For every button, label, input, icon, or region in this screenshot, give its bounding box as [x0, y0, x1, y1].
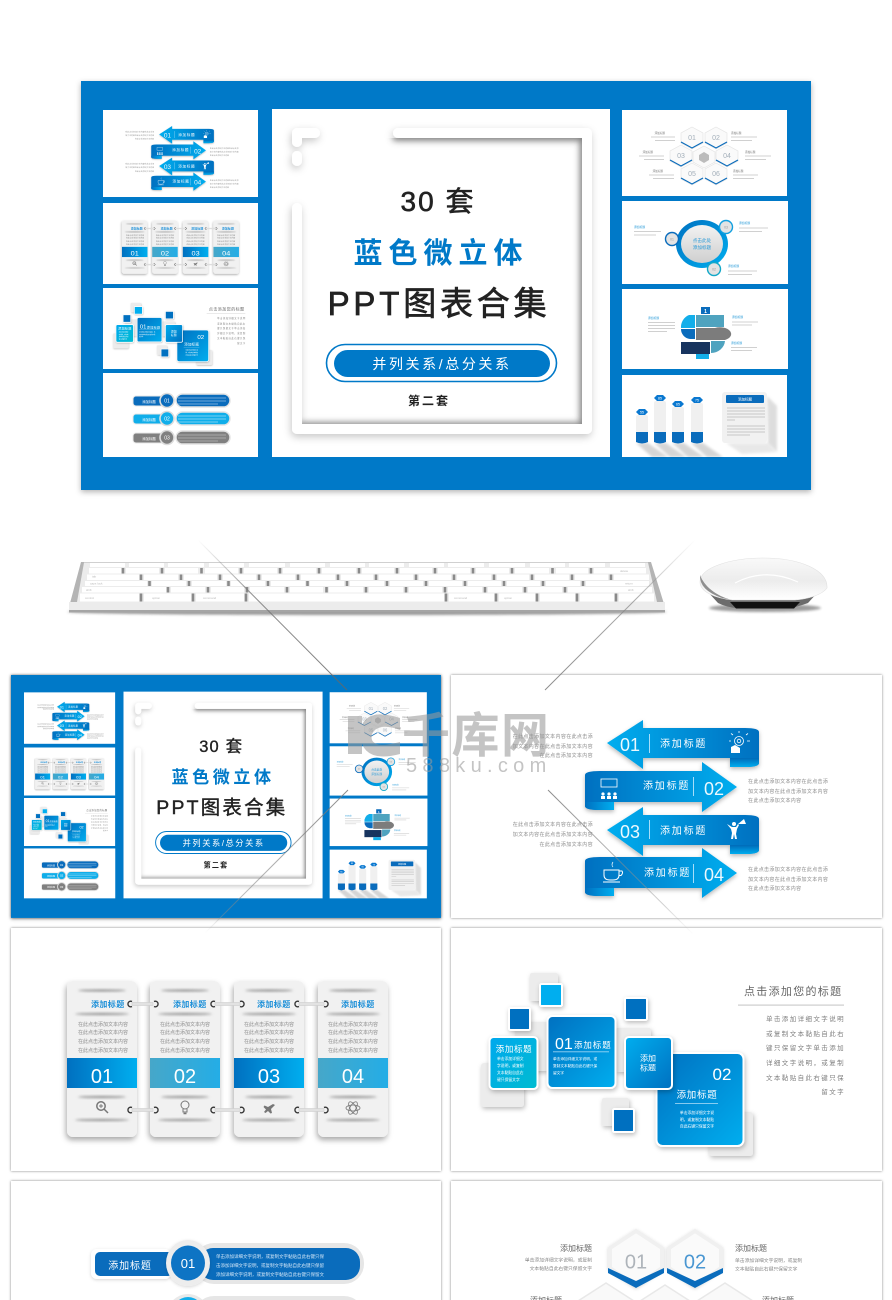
icon: light bulb — [181, 1101, 189, 1114]
thumbnail: cards slide — [103, 203, 258, 284]
note card: 添加标题 — [738, 396, 752, 402]
key labels: control — [85, 596, 94, 600]
box: 01: 复制文本黏贴自此右键只保 — [553, 1063, 598, 1068]
thumbnail: hexagon slide: 05 — [688, 171, 696, 178]
card 01: 01 — [91, 1066, 113, 1088]
paragraph: 留文字 — [821, 1087, 845, 1096]
small blue squares — [509, 984, 647, 1132]
key labels: shift — [86, 588, 92, 592]
note card — [722, 392, 777, 454]
thumbnail: pill rows slide: 添加标题 — [142, 436, 156, 441]
card 04: 在此点击添加文本内容 — [328, 1047, 378, 1054]
key labels: shift — [628, 588, 634, 592]
thumbnail: pill rows slide: 添加标题 — [142, 417, 156, 422]
label upper right: 单击添加详细文字说明，或复制 — [735, 1257, 802, 1264]
column 4: 75 — [695, 398, 699, 402]
paragraph: 键只保留文字单击添加 — [766, 1043, 845, 1052]
text block upper right: 在此点击添加文本内容在此点击添 — [748, 778, 828, 785]
thumbnail: circle slide: 01 — [670, 238, 674, 242]
pill row 01 — [91, 1240, 364, 1286]
thumbnail: circle slide: 添加标题 — [739, 221, 750, 225]
thumbnail: hexagon slide: 添加标题 — [745, 150, 756, 154]
box: side title blue — [625, 1037, 672, 1089]
text block lower left: 加文本内容在此点击添加文本内容 — [513, 831, 593, 838]
hexagon 02: 02 — [684, 1252, 706, 1274]
card 01 — [67, 981, 137, 1137]
key labels: caps lock — [90, 582, 103, 586]
column 1: 55 — [640, 410, 644, 414]
box: side title blue: 添加 — [640, 1053, 656, 1063]
card 02: 在此点击添加文本内容 — [160, 1021, 210, 1028]
arrow 03 — [607, 807, 759, 856]
box: 02: 单击添加详细文字说 — [680, 1110, 714, 1115]
paragraph: 单击添加详细文字说明 — [766, 1014, 845, 1023]
arrow 03: 添加标题 — [660, 824, 707, 837]
thumbnail: hexagon slide: 添加标题 — [643, 150, 653, 154]
key labels: command — [203, 596, 217, 600]
card 02: 在此点击添加文本内容 — [160, 1038, 210, 1045]
card 03: 在此点击添加文本内容 — [244, 1029, 294, 1036]
icon: magnifier — [97, 1102, 108, 1113]
slide: four arrows — [451, 675, 882, 918]
thumbnail: hexagon slide: 03 — [677, 153, 685, 160]
column 3: 65 — [676, 402, 680, 406]
box: side title blue: 标题 — [640, 1062, 656, 1072]
column 4 — [691, 397, 703, 444]
box: 01 — [548, 1016, 616, 1088]
thumbnail: hexagon slide: 添加标题 — [655, 131, 665, 135]
hexagon 02 — [667, 1231, 723, 1288]
arrow 02: 添加标题 — [643, 779, 690, 792]
card 01: 在此点击添加文本内容 — [78, 1047, 128, 1054]
text block lower left — [513, 821, 593, 848]
thumbnail: pill rows slide: 03 — [164, 436, 170, 442]
icon: coffee cup — [603, 862, 623, 882]
thumbnail: hexagon slide: 添加标题 — [733, 169, 744, 173]
pill row 01: 击添加详细文字说明，或复制文字黏贴自此右键只保留 — [216, 1262, 324, 1269]
slide: layered squares — [451, 928, 882, 1171]
grey backing squares — [481, 973, 753, 1156]
thumbnail: S-shape puzzle slide: 添加标题 — [731, 341, 742, 345]
thumbnail: circle slide: 点击此处 — [693, 237, 712, 244]
card 04: 在此点击添加文本内容 — [328, 1029, 378, 1036]
label upper left: 文本黏贴自此右键只保留文字 — [530, 1265, 592, 1272]
thumbnail: S-shape puzzle slide — [622, 289, 788, 369]
cover slide: large blue poster — [81, 81, 811, 490]
text block upper right — [748, 778, 828, 804]
column 3 — [672, 401, 684, 444]
thumbnail: pill rows slide: 02 — [164, 416, 170, 422]
hexagon 01 — [608, 1231, 664, 1288]
box: 02: 明，或复制文本黏贴 — [680, 1117, 714, 1122]
label upper right: 文本黏贴自此右键只保留文字 — [735, 1266, 798, 1272]
text block lower left: 在此点击添加文本内容在此点击添 — [513, 821, 593, 828]
computer mouse — [700, 558, 827, 612]
text block upper right: 加文本内容在此点击添加文本内容 — [748, 788, 828, 795]
label upper right: 添加标题 — [735, 1243, 767, 1253]
text block lower left: 在此点击添加文本内容 — [539, 841, 593, 848]
white frame — [297, 133, 587, 429]
slide: pill rows, cropped — [11, 1181, 441, 1300]
card 01: 在此点击添加文本内容 — [78, 1038, 128, 1045]
subtitle pill — [326, 344, 556, 382]
arrow 04 — [585, 848, 737, 898]
key labels: tab — [92, 574, 97, 578]
card 03 — [234, 981, 304, 1137]
icon: atom — [346, 1100, 360, 1116]
thumbnail: hexagon slide: 添加标题 — [653, 169, 663, 173]
arrow 04: 添加标题 — [644, 866, 691, 879]
box: side title cyan: 字说明，或复制 — [497, 1063, 524, 1068]
pill row 01: 添加标题 — [108, 1259, 152, 1272]
key labels: option — [504, 596, 513, 600]
box: side title cyan: 单击添加详细文 — [497, 1056, 524, 1061]
slide: cover thumbnail copy — [11, 675, 441, 918]
hexagon 01: 01 — [625, 1252, 647, 1274]
thumbnail: hexagon slide: 02 — [712, 135, 720, 142]
icon: airplane — [264, 1104, 275, 1114]
text block lower right: 在此点击添加文本内容 — [748, 885, 802, 892]
ring connectors — [128, 1001, 328, 1113]
subtitle pill: 并列关系/总分关系 — [372, 356, 512, 372]
set number: 第二套 — [408, 393, 450, 408]
key stems — [123, 568, 616, 602]
thumbnail: hexagon slide: 01 — [688, 135, 696, 142]
card 03: 在此点击添加文本内容 — [244, 1021, 294, 1028]
thumbnail: squares slide — [103, 288, 258, 369]
arrow 04: 04 — [704, 865, 724, 885]
card 02: 02 — [174, 1066, 196, 1088]
box: 01: 01 — [555, 1036, 573, 1053]
label upper right — [735, 1243, 802, 1272]
keyboard — [67, 562, 667, 615]
key labels: return — [625, 582, 633, 586]
text block upper right: 在此点击添加文本内容 — [748, 797, 802, 804]
column 2: 85 — [658, 396, 662, 400]
thumbnail: circle slide: 添加标题 — [693, 244, 712, 251]
card 03: 添加标题 — [257, 999, 291, 1009]
paragraph — [766, 1014, 845, 1096]
card 03: 在此点击添加文本内容 — [244, 1038, 294, 1045]
card 02: 在此点击添加文本内容 — [160, 1029, 210, 1036]
icon: idea person — [729, 731, 750, 753]
key labels: option — [152, 596, 161, 600]
box: 02: 02 — [713, 1065, 731, 1084]
thumbnail: circle slide: 02 — [712, 268, 716, 272]
thumbnail: columns and note slide — [622, 375, 787, 457]
inner recess shadow — [300, 136, 584, 426]
box: 01: 添加标题 — [574, 1040, 612, 1050]
box: side title cyan — [490, 1037, 538, 1089]
box: side title cyan: 添加标题 — [496, 1044, 532, 1054]
text block upper left: 在此点击添加文本内容 — [539, 752, 593, 759]
watermark diagonal lines — [198, 540, 695, 935]
card 03: 在此点击添加文本内容 — [244, 1047, 294, 1054]
thumbnail: hexagon slide: 06 — [712, 171, 720, 178]
central white panel — [272, 109, 610, 457]
thumbnail: pill rows slide: 01 — [164, 398, 170, 404]
key labels: delete — [620, 569, 629, 573]
lower hexagon row — [578, 1283, 753, 1300]
arrow 02: 02 — [704, 779, 724, 799]
card 03: 03 — [258, 1066, 280, 1088]
watermark logo mark — [348, 714, 400, 756]
arrow 03: 03 — [620, 822, 640, 842]
card 04 — [318, 981, 388, 1137]
thumbnail: hexagon slide: 添加标题 — [731, 131, 742, 135]
column 1 — [636, 409, 648, 444]
paragraph: 文本黏贴自此右键只保 — [766, 1073, 845, 1082]
text block upper left: 在此点击添加文本内容在此点击添 — [513, 733, 593, 740]
slide: four cards — [11, 928, 441, 1171]
icon: person with megaphone — [727, 819, 746, 839]
card 02 — [150, 981, 220, 1137]
watermark wordmark: 千库网 — [402, 710, 551, 763]
box: 01: 留文字 — [553, 1070, 564, 1075]
slide: hexagons, cropped — [451, 1181, 882, 1300]
column 2 — [654, 395, 666, 444]
pill row 02, cut off — [166, 1294, 364, 1300]
text block lower right: 加文本内容在此点击添加文本内容 — [748, 876, 828, 883]
thumbnail: circle slide: 添加标题 — [634, 225, 645, 229]
arrow 01: 01 — [620, 735, 640, 755]
card 02: 在此点击添加文本内容 — [160, 1047, 210, 1054]
card 02: 添加标题 — [173, 999, 207, 1009]
box: 02: 添加标题 — [677, 1089, 717, 1101]
icon: presentation board — [601, 779, 617, 799]
title line: blue micro 3D: 蓝色微立体 — [353, 237, 529, 270]
card 01: 在此点击添加文本内容 — [78, 1021, 128, 1028]
text block lower right: 在此点击添加文本内容在此点击添 — [748, 866, 828, 873]
text block lower right — [748, 866, 828, 892]
box: 01: 单击添加详细文字说明，或 — [553, 1056, 598, 1061]
heading: 点击添加您的标题 — [744, 984, 842, 998]
thumbnail: circle slide: 03 — [724, 226, 728, 230]
thumbnail: pill rows slide — [103, 373, 258, 457]
pill row 01: 01 — [181, 1256, 195, 1271]
card 01: 在此点击添加文本内容 — [78, 1029, 128, 1036]
thumbnail: S-shape puzzle slide: 1 — [704, 309, 707, 315]
label upper left: 添加标题 — [560, 1243, 592, 1253]
pill row 01: 单击添加详细文字说明，或复制文字黏贴自此右键只保 — [216, 1253, 324, 1260]
thumbnail: pill rows slide: 添加标题 — [142, 399, 156, 404]
thumbnail: circle slide: 添加标题 — [728, 264, 739, 268]
watermark domain: 588ku.com — [406, 755, 552, 777]
text block upper left: 加文本内容在此点击添加文本内容 — [513, 743, 593, 750]
thumbnail: circle slide — [622, 201, 788, 284]
label upper left — [525, 1243, 592, 1272]
key rows — [80, 563, 654, 602]
card 01: 添加标题 — [91, 999, 125, 1009]
arrow 01: 添加标题 — [660, 737, 707, 750]
thumbnail: arrows slide — [103, 110, 258, 197]
text block upper left — [513, 733, 593, 759]
thumbnail: hexagon slide: 04 — [723, 153, 731, 160]
paragraph: 详细文字说明，或复制 — [766, 1058, 845, 1067]
thumbnail: S-shape puzzle slide: 添加标题 — [732, 315, 743, 319]
card 04: 添加标题 — [341, 999, 375, 1009]
pill row 01: 添加详细文字说明，或复制文字黏贴自此右键只保留文 — [216, 1271, 324, 1278]
key labels — [85, 569, 634, 600]
card 04: 04 — [342, 1066, 364, 1088]
title line: 30 sets: 30 套 — [401, 186, 475, 217]
thumbnail: hexagon slide — [622, 110, 787, 196]
paragraph: 或复制文本黏贴自此右 — [766, 1029, 845, 1038]
arrow 02 — [585, 762, 737, 812]
box: side title cyan: 文本黏贴自此右 — [497, 1070, 524, 1075]
box: 02: 自此右键只保留文字 — [680, 1124, 714, 1128]
title line: PPT chart collection: PPT图表合集 — [328, 285, 550, 322]
arrow 01 — [607, 720, 759, 769]
card 04: 在此点击添加文本内容 — [328, 1021, 378, 1028]
box: side title cyan: 键只保留文字 — [497, 1077, 520, 1082]
watermark: logo and site name — [348, 710, 552, 777]
thumbnail: S-shape puzzle slide: 添加标题 — [648, 316, 659, 320]
card 04: 在此点击添加文本内容 — [328, 1038, 378, 1045]
key labels: command — [454, 596, 468, 600]
label upper left: 单击添加详细文字说明，或复制 — [525, 1256, 592, 1264]
box: 02 — [656, 1053, 744, 1146]
